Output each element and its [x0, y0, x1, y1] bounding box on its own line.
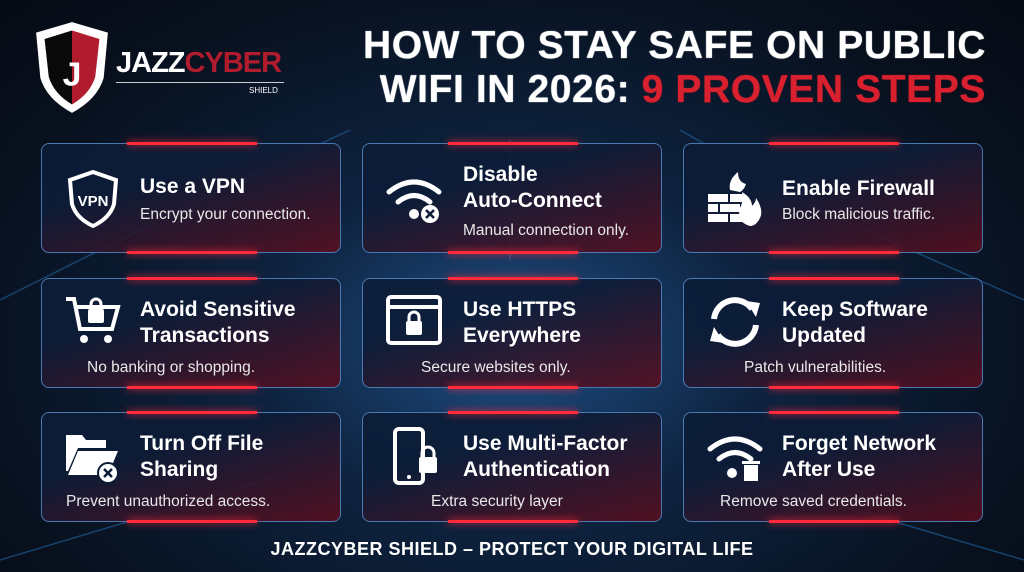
card: Avoid Sensitive Transactions: Avoid Sensitive — [140, 298, 296, 321]
icon: phone lock — [393, 427, 437, 485]
card: Forget Network After Use: Forget Network — [782, 432, 936, 455]
title: HOW TO STAY SAFE ON PUBLIC — [363, 24, 986, 67]
card: Use HTTPS Everywhere — [362, 278, 662, 388]
icon: refresh — [710, 297, 760, 347]
icon: VPN shield — [68, 170, 118, 228]
card: Disable Auto-Connect — [362, 143, 662, 253]
card: Use a VPN — [41, 143, 341, 253]
icon: wifi x — [386, 179, 442, 223]
icon: VPN shield: VPN — [78, 193, 108, 210]
card: Forget Network After Use: Remove saved credentials. — [720, 493, 907, 510]
logo: J — [63, 55, 81, 93]
card: Use HTTPS Everywhere: Use HTTPS — [463, 298, 576, 321]
card: Disable Auto-Connect: Disable — [463, 163, 538, 186]
card: Use HTTPS Everywhere: Secure websites only. — [421, 359, 571, 376]
card: Turn Off File Sharing: Turn Off File — [140, 432, 263, 455]
card: Disable Auto-Connect: Auto-Connect — [463, 189, 602, 212]
card: Use a VPN: Use a VPN — [140, 175, 245, 198]
card: Enable Firewall — [683, 143, 983, 253]
card: Use Multi-Factor Authentication: Use Multi-Factor — [463, 432, 628, 455]
card: Use a VPN: Encrypt your connection. — [140, 206, 311, 223]
card: Use Multi-Factor Authentication: Extra security layer — [431, 493, 563, 510]
icon: browser lock — [386, 295, 442, 345]
icon: cart lock — [66, 297, 121, 343]
card: Turn Off File Sharing: Prevent unauthorized access. — [66, 493, 270, 510]
card: Use HTTPS Everywhere: Everywhere — [463, 324, 581, 347]
card: Keep Software Updated: Patch vulnerabilities. — [744, 359, 886, 376]
card: Keep Software Updated: Updated — [782, 324, 866, 347]
title: WIFI IN 2026: 9 PROVEN STEPS — [380, 68, 986, 111]
footer: JAZZCYBER SHIELD – PROTECT YOUR DIGITAL LIFE — [270, 539, 754, 559]
card: Avoid Sensitive Transactions — [41, 278, 341, 388]
icon: firewall — [708, 172, 762, 226]
title — [363, 24, 986, 111]
logo: JAZZCYBER — [116, 47, 281, 79]
icon: wifi trash — [708, 436, 762, 481]
card: Enable Firewall: Enable Firewall — [782, 177, 935, 200]
logo — [36, 22, 284, 113]
card: Avoid Sensitive Transactions: No banking or shopping. — [87, 359, 255, 376]
card: Forget Network After Use — [683, 412, 983, 522]
card: Keep Software Updated — [683, 278, 983, 388]
card: Forget Network After Use: After Use — [782, 458, 875, 481]
icon: folder x — [66, 435, 119, 484]
card: Use Multi-Factor Authentication: Authentication — [463, 458, 610, 481]
card: Enable Firewall: Block malicious traffic. — [782, 206, 935, 223]
card: Turn Off File Sharing: Sharing — [140, 458, 218, 481]
card: Keep Software Updated: Keep Software — [782, 298, 928, 321]
card: Turn Off File Sharing — [41, 412, 341, 522]
card: Avoid Sensitive Transactions: Transactions — [140, 324, 270, 347]
card: Use Multi-Factor Authentication — [362, 412, 662, 522]
logo: SHIELD — [249, 86, 278, 95]
card: Disable Auto-Connect: Manual connection only. — [463, 222, 629, 239]
